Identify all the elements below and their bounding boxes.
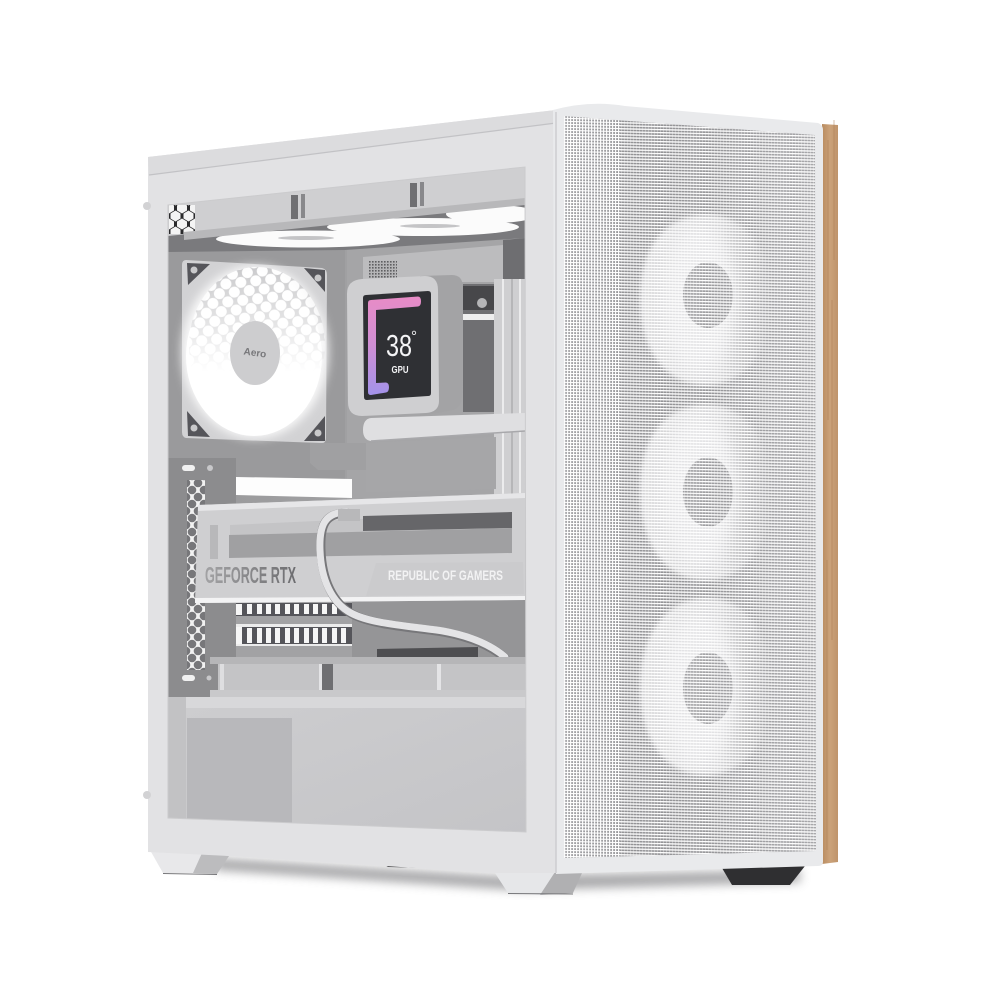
graphics card: [195, 493, 525, 603]
IO panel with perforation: [363, 238, 526, 282]
white bar above GPU: [236, 477, 352, 498]
expansion slots: [236, 603, 352, 646]
cable connector: [338, 509, 360, 521]
bottom fan bay: [210, 657, 526, 697]
pump screen: °: [411, 328, 417, 345]
wall below GPU: [352, 600, 526, 658]
AIO pump block: [347, 275, 463, 416]
top fan glow 1: [216, 230, 400, 248]
GPU brand text: GEFORCE RTX: [205, 562, 296, 588]
front fan 1: [640, 215, 772, 385]
back wall: [236, 250, 526, 600]
case side frame: [148, 110, 556, 873]
foot: left front: [150, 850, 229, 874]
front panel frame: [553, 104, 823, 874]
foot: centre: [380, 862, 435, 868]
case top band: [143, 110, 556, 799]
fan hub with logo: Aero: [243, 346, 267, 361]
GPU power cable: [320, 512, 505, 658]
top fan glow 3: [446, 206, 525, 222]
GPU series text: REPUBLIC OF GAMERS: [388, 568, 503, 583]
lower motherboard step: [494, 437, 496, 489]
motherboard wall: [168, 248, 345, 490]
fan hub with logo: [230, 321, 280, 385]
readout label: GPU: [392, 365, 408, 376]
fan bracket: [310, 443, 377, 470]
screen accent bracket: [368, 296, 421, 395]
temperature readout: 38: [386, 328, 412, 363]
interior seen through glass window: [168, 160, 538, 838]
product illustration: PC case: [143, 104, 838, 896]
foot: rear black: [722, 866, 805, 885]
floor shadow: [215, 858, 800, 890]
window edge line: [168, 167, 526, 832]
front fan 3: [640, 598, 772, 775]
RAM area: [463, 284, 496, 412]
top rail: [184, 198, 525, 240]
pump screen: [363, 291, 431, 400]
rear fan: [182, 260, 328, 443]
radiator fins: [494, 279, 526, 497]
foot: right front: [493, 870, 582, 895]
PSU shroud: [168, 697, 528, 838]
shroud cutout: [187, 718, 292, 824]
rear IO strip: [168, 458, 236, 698]
coolant tube: [363, 413, 525, 441]
top fan glow 2: [327, 218, 519, 236]
front mesh with three fans: [560, 100, 820, 870]
wood side panel: [822, 120, 838, 864]
top fan bay: [168, 167, 538, 252]
front fan 2: [640, 405, 772, 580]
